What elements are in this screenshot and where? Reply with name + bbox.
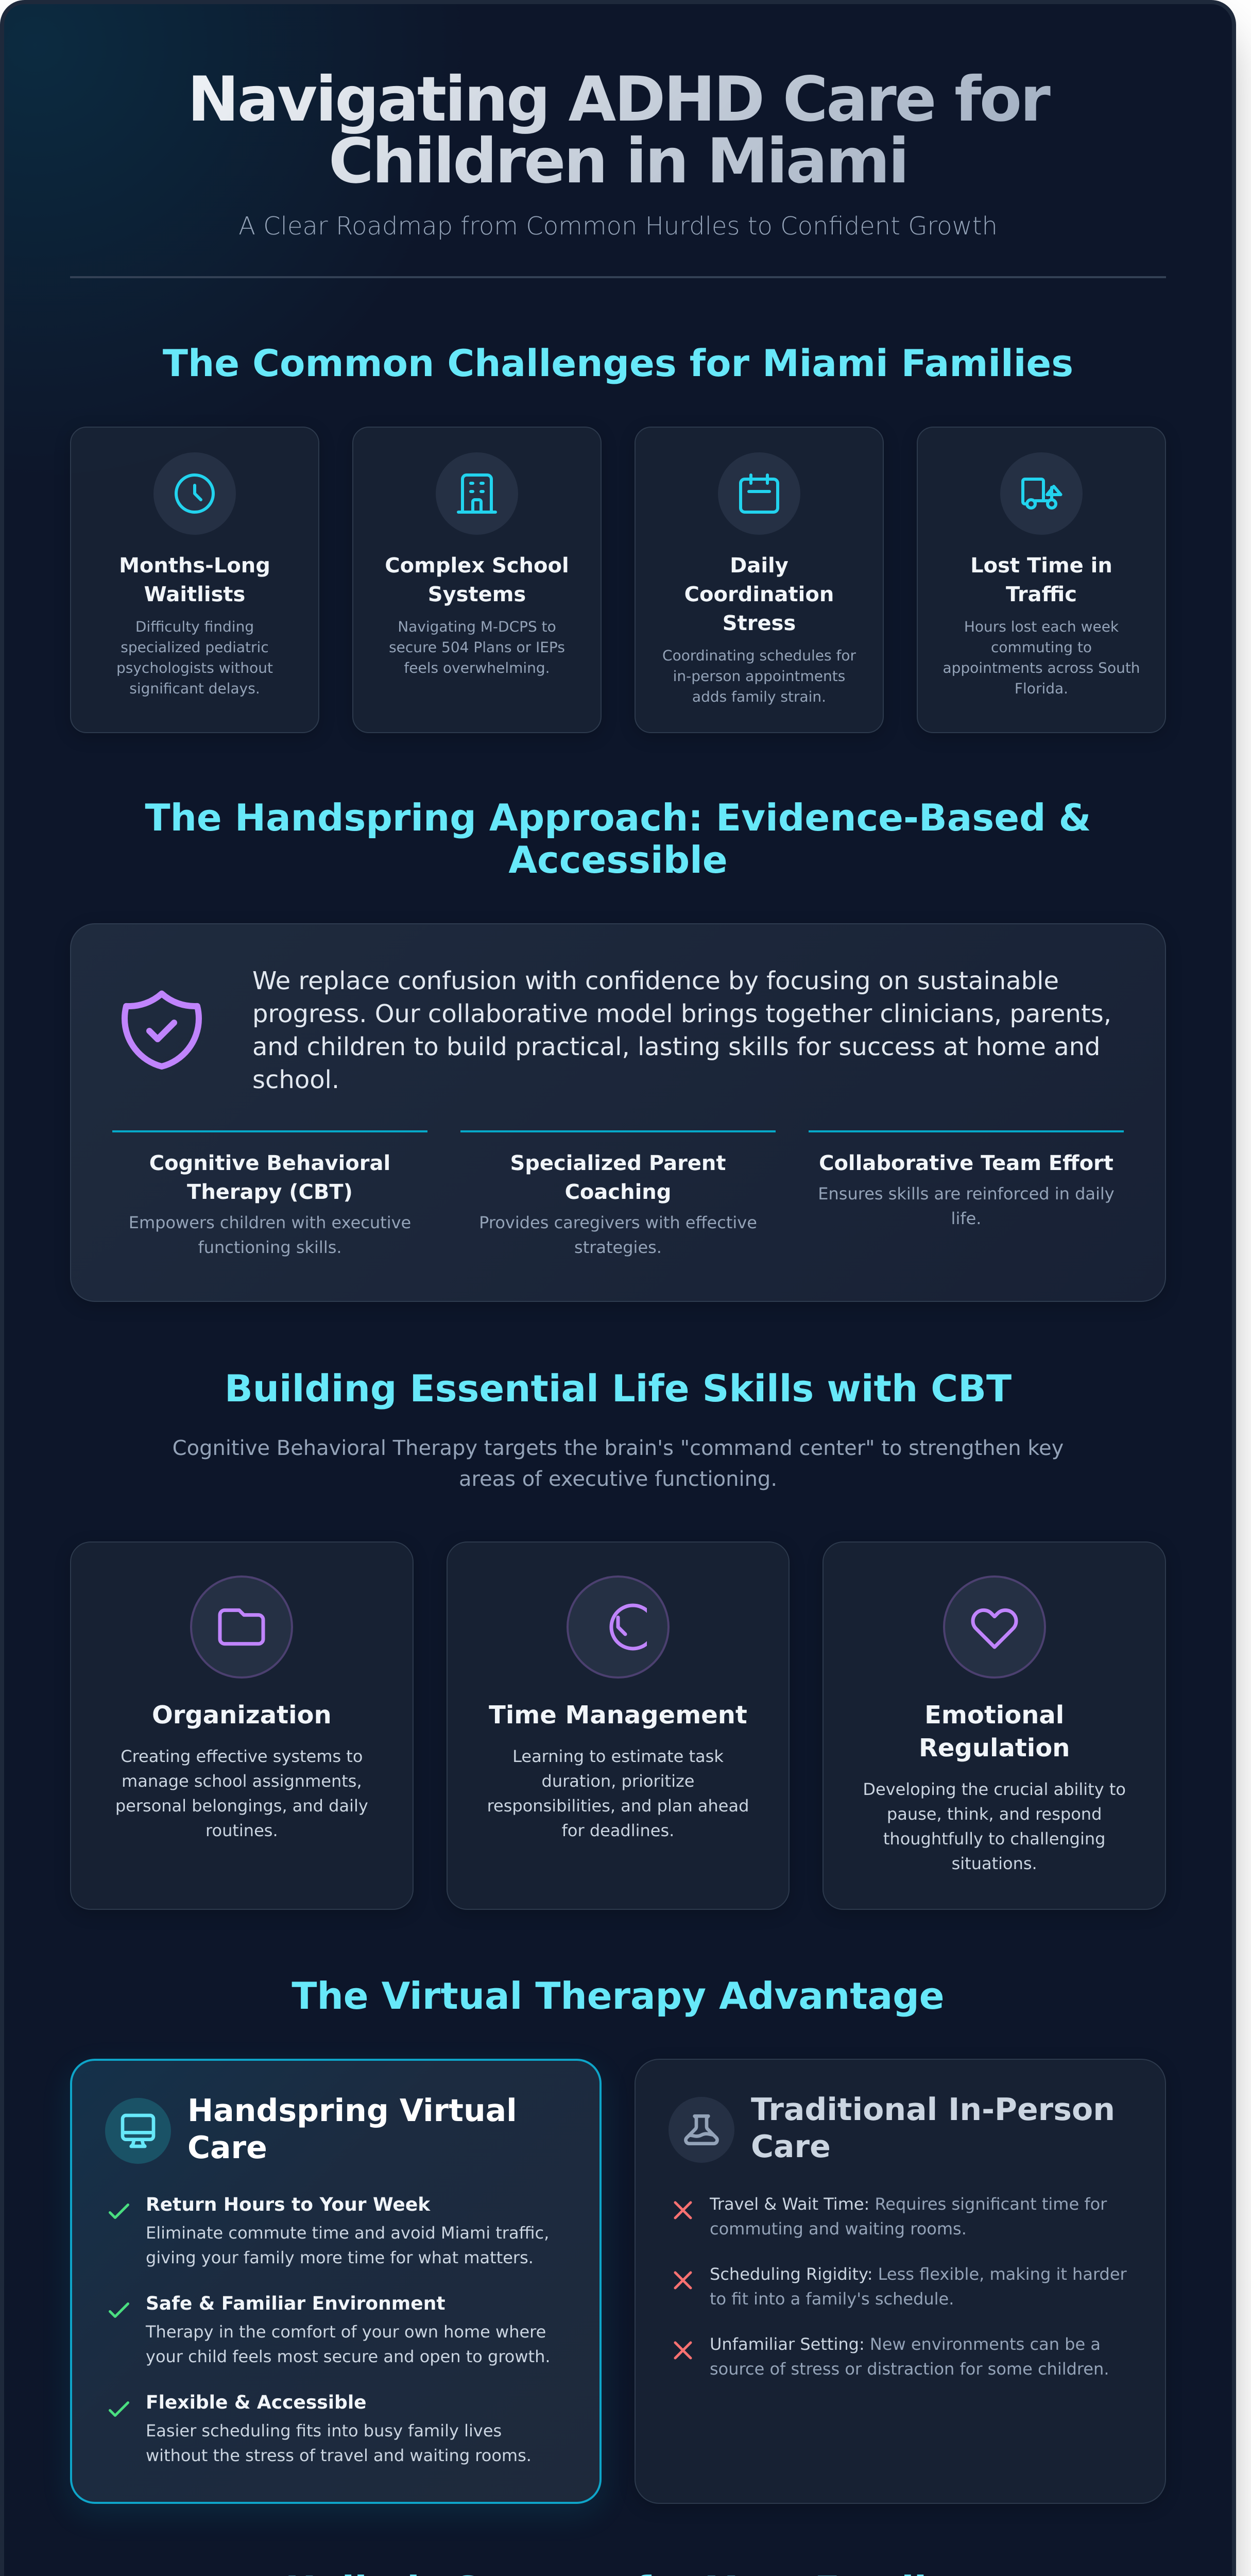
column heading: Therapy (CBT) bbox=[187, 1180, 353, 1204]
card text: Navigating M-DCPS to bbox=[398, 618, 556, 635]
card heading: Organization bbox=[152, 1701, 332, 1730]
icon: check bbox=[104, 2196, 134, 2227]
icon: folder bbox=[190, 1575, 293, 1679]
benefit: flexible bbox=[146, 2391, 599, 2473]
drawback text: to fit into a family's schedule. bbox=[710, 2289, 954, 2309]
section intro bbox=[173, 1436, 1064, 1491]
drawback text: commuting and waiting rooms. bbox=[710, 2219, 967, 2239]
card text: commuting to bbox=[991, 639, 1092, 656]
card heading: Complex School bbox=[385, 554, 569, 578]
card: daily coordination stress bbox=[635, 427, 884, 733]
column text: strategies. bbox=[574, 1238, 662, 1257]
column text: functioning skills. bbox=[198, 1238, 342, 1257]
subtitle: A Clear Roadmap from Common Hurdles to Confident Growth bbox=[238, 212, 998, 241]
column heading bbox=[510, 1151, 726, 1204]
icon: x mark bbox=[667, 2335, 698, 2366]
panel heading bbox=[187, 2092, 517, 2166]
benefit text bbox=[146, 2391, 599, 2468]
benefit text bbox=[146, 2292, 599, 2369]
panel: traditional in-person care bbox=[635, 2059, 1166, 2504]
card text: manage school assignments, bbox=[122, 1771, 362, 1791]
column heading: Coaching bbox=[565, 1180, 671, 1204]
column: CBT bbox=[112, 1130, 427, 1260]
benefit text: your child feels most secure and open to growth. bbox=[146, 2347, 551, 2366]
card heading bbox=[970, 554, 1112, 606]
column heading: Specialized Parent bbox=[510, 1151, 726, 1175]
card heading: Months-Long bbox=[119, 554, 270, 578]
panel heading: Traditional In-Person bbox=[751, 2092, 1115, 2128]
icon: truck bbox=[1000, 452, 1083, 535]
card text: in-person appointments bbox=[673, 668, 845, 685]
benefit: safe environment bbox=[146, 2292, 599, 2374]
panel heading: Care bbox=[751, 2129, 831, 2165]
icon: x mark bbox=[667, 2195, 698, 2226]
column text: Empowers children with executive bbox=[129, 1213, 411, 1232]
card text: Creating effective systems to bbox=[121, 1747, 363, 1766]
benefit text: Safe & Familiar Environment bbox=[146, 2293, 445, 2314]
panel: handspring virtual care bbox=[70, 2059, 602, 2504]
benefit: return hours bbox=[146, 2193, 599, 2275]
card heading: Lost Time in bbox=[970, 554, 1112, 578]
title: Children in Miami bbox=[329, 126, 907, 197]
card text bbox=[829, 1777, 1160, 1876]
column heading: Collaborative Team Effort bbox=[819, 1151, 1113, 1175]
column heading bbox=[149, 1151, 390, 1204]
card heading: Coordination bbox=[684, 583, 834, 606]
card text: Florida. bbox=[1015, 680, 1068, 697]
column text bbox=[479, 1213, 757, 1257]
card text bbox=[116, 618, 273, 697]
benefit text: without the stress of travel and waiting rooms. bbox=[146, 2446, 532, 2465]
card text: Difficulty finding bbox=[135, 618, 254, 635]
card text: situations. bbox=[952, 1854, 1037, 1873]
card text: Hours lost each week bbox=[964, 618, 1119, 635]
section intro: areas of executive functioning. bbox=[459, 1467, 777, 1491]
drawback text bbox=[710, 2262, 1163, 2311]
card text: specialized pediatric bbox=[121, 639, 269, 656]
column heading: Cognitive Behavioral bbox=[149, 1151, 390, 1175]
title bbox=[70, 69, 1166, 193]
card text: appointments across South bbox=[942, 659, 1140, 676]
title: Navigating ADHD Care for bbox=[187, 64, 1049, 135]
card text bbox=[662, 647, 856, 705]
column text bbox=[129, 1213, 411, 1257]
intro text: We replace confusion with confidence by focusing on sustainable bbox=[252, 967, 1059, 995]
card: time management bbox=[447, 1541, 790, 1910]
icon: calendar bbox=[718, 452, 800, 535]
heading: handspring approach: The Handspring Approach: Evidence-Based & bbox=[145, 796, 1091, 839]
card text: pause, think, and respond bbox=[887, 1804, 1102, 1824]
intro text: progress. Our collaborative model brings together clinicians, parents, bbox=[252, 999, 1111, 1028]
icon: flask bbox=[669, 2097, 734, 2163]
heading: life skills: Building Essential Life Skills with CBT bbox=[225, 1367, 1012, 1410]
card text: personal belongings, and daily bbox=[115, 1796, 368, 1816]
column: team effort bbox=[809, 1130, 1124, 1231]
heading: virtual advantage: The Virtual Therapy Advantage bbox=[292, 1974, 945, 2018]
card text bbox=[115, 1747, 368, 1840]
panel: approach bbox=[70, 923, 1166, 1302]
card text: Coordinating schedules for bbox=[662, 647, 856, 664]
card heading: Stress bbox=[723, 612, 796, 635]
column text: life. bbox=[951, 1209, 981, 1228]
drawback text bbox=[710, 2192, 1163, 2241]
drawback: rigidity bbox=[710, 2262, 1163, 2344]
card text: feels overwhelming. bbox=[404, 659, 550, 676]
drawback: travel bbox=[710, 2192, 1163, 2274]
card text: Learning to estimate task bbox=[512, 1747, 724, 1766]
card: lost time in traffic bbox=[917, 427, 1166, 733]
icon: monitor bbox=[105, 2098, 171, 2164]
icon: heart bbox=[943, 1575, 1046, 1679]
icon: clipped clock bbox=[567, 1575, 670, 1679]
intro text: school. bbox=[252, 1065, 339, 1094]
drawback text bbox=[710, 2332, 1163, 2381]
card heading: Daily bbox=[730, 554, 789, 578]
intro text: and children to build practical, lasting skills for success at home and bbox=[252, 1032, 1101, 1061]
card text: for deadlines. bbox=[562, 1821, 674, 1840]
icon: x mark bbox=[667, 2265, 698, 2296]
benefit text: Flexible & Accessible bbox=[146, 2392, 367, 2413]
drawback text: Scheduling Rigidity: Less flexible, making it harder bbox=[710, 2264, 1127, 2284]
card heading bbox=[684, 554, 834, 635]
column: parent coaching bbox=[460, 1130, 776, 1260]
benefit text: Therapy in the comfort of your own home where bbox=[146, 2322, 546, 2342]
card heading: Regulation bbox=[919, 1734, 1070, 1762]
card text: duration, prioritize bbox=[542, 1771, 694, 1791]
intro text bbox=[252, 967, 1111, 1094]
drawback text: Unfamiliar Setting: New environments can be a bbox=[710, 2334, 1101, 2354]
column text: Ensures skills are reinforced in daily bbox=[818, 1184, 1115, 1204]
benefit text: giving your family more time for what matters. bbox=[146, 2248, 534, 2267]
icon: building bbox=[436, 452, 518, 535]
heading: handspring approach bbox=[145, 796, 1091, 882]
card text: adds family strain. bbox=[692, 688, 826, 705]
card text bbox=[389, 618, 565, 676]
card heading bbox=[919, 1701, 1070, 1762]
card: complex school systems bbox=[352, 427, 602, 733]
icon: check bbox=[104, 2295, 134, 2326]
card heading: Emotional bbox=[924, 1701, 1064, 1730]
card text bbox=[942, 618, 1140, 697]
benefit text: Eliminate commute time and avoid Miami traffic, bbox=[146, 2223, 549, 2243]
card: organization bbox=[70, 1541, 414, 1910]
benefit text: Easier scheduling fits into busy family lives bbox=[146, 2421, 502, 2441]
icon: clock bbox=[153, 452, 236, 535]
panel heading bbox=[751, 2091, 1115, 2165]
panel heading: Handspring Virtual bbox=[187, 2093, 517, 2129]
card heading: Systems bbox=[428, 583, 526, 606]
card heading bbox=[119, 554, 270, 606]
drawback text: Travel & Wait Time: Requires significant time for bbox=[710, 2194, 1107, 2214]
card text: secure 504 Plans or IEPs bbox=[389, 639, 565, 656]
card text: responsibilities, and plan ahead bbox=[487, 1796, 749, 1816]
card heading bbox=[385, 554, 569, 606]
card: months-long waitlists bbox=[70, 427, 319, 733]
card heading: Waitlists bbox=[144, 583, 245, 606]
card heading: Time Management bbox=[489, 1701, 747, 1730]
card text: psychologists without bbox=[116, 659, 273, 676]
card heading: Traffic bbox=[1006, 583, 1077, 606]
card text: Developing the crucial ability to bbox=[863, 1780, 1126, 1799]
drawback: setting bbox=[710, 2332, 1163, 2414]
section intro: Cognitive Behavioral Therapy targets the brain's "command center" to strengthen key bbox=[173, 1436, 1064, 1460]
card text: routines. bbox=[205, 1821, 278, 1840]
benefit text: Return Hours to Your Week bbox=[146, 2194, 430, 2215]
heading: handspring approach: Accessible bbox=[508, 838, 728, 882]
benefit text bbox=[146, 2193, 599, 2270]
card: emotional regulation bbox=[822, 1541, 1166, 1910]
card text: significant delays. bbox=[129, 680, 260, 697]
icon: check bbox=[104, 2394, 134, 2425]
column text bbox=[818, 1184, 1115, 1228]
card text bbox=[487, 1747, 749, 1840]
card text: thoughtfully to challenging bbox=[883, 1829, 1105, 1849]
panel heading: Care bbox=[187, 2130, 267, 2166]
icon: shield check bbox=[122, 990, 202, 1070]
heading: common challenges: The Common Challenges for Miami Families bbox=[163, 342, 1073, 385]
drawback text: source of stress or distraction for some children. bbox=[710, 2359, 1109, 2379]
column text: Provides caregivers with effective bbox=[479, 1213, 757, 1232]
